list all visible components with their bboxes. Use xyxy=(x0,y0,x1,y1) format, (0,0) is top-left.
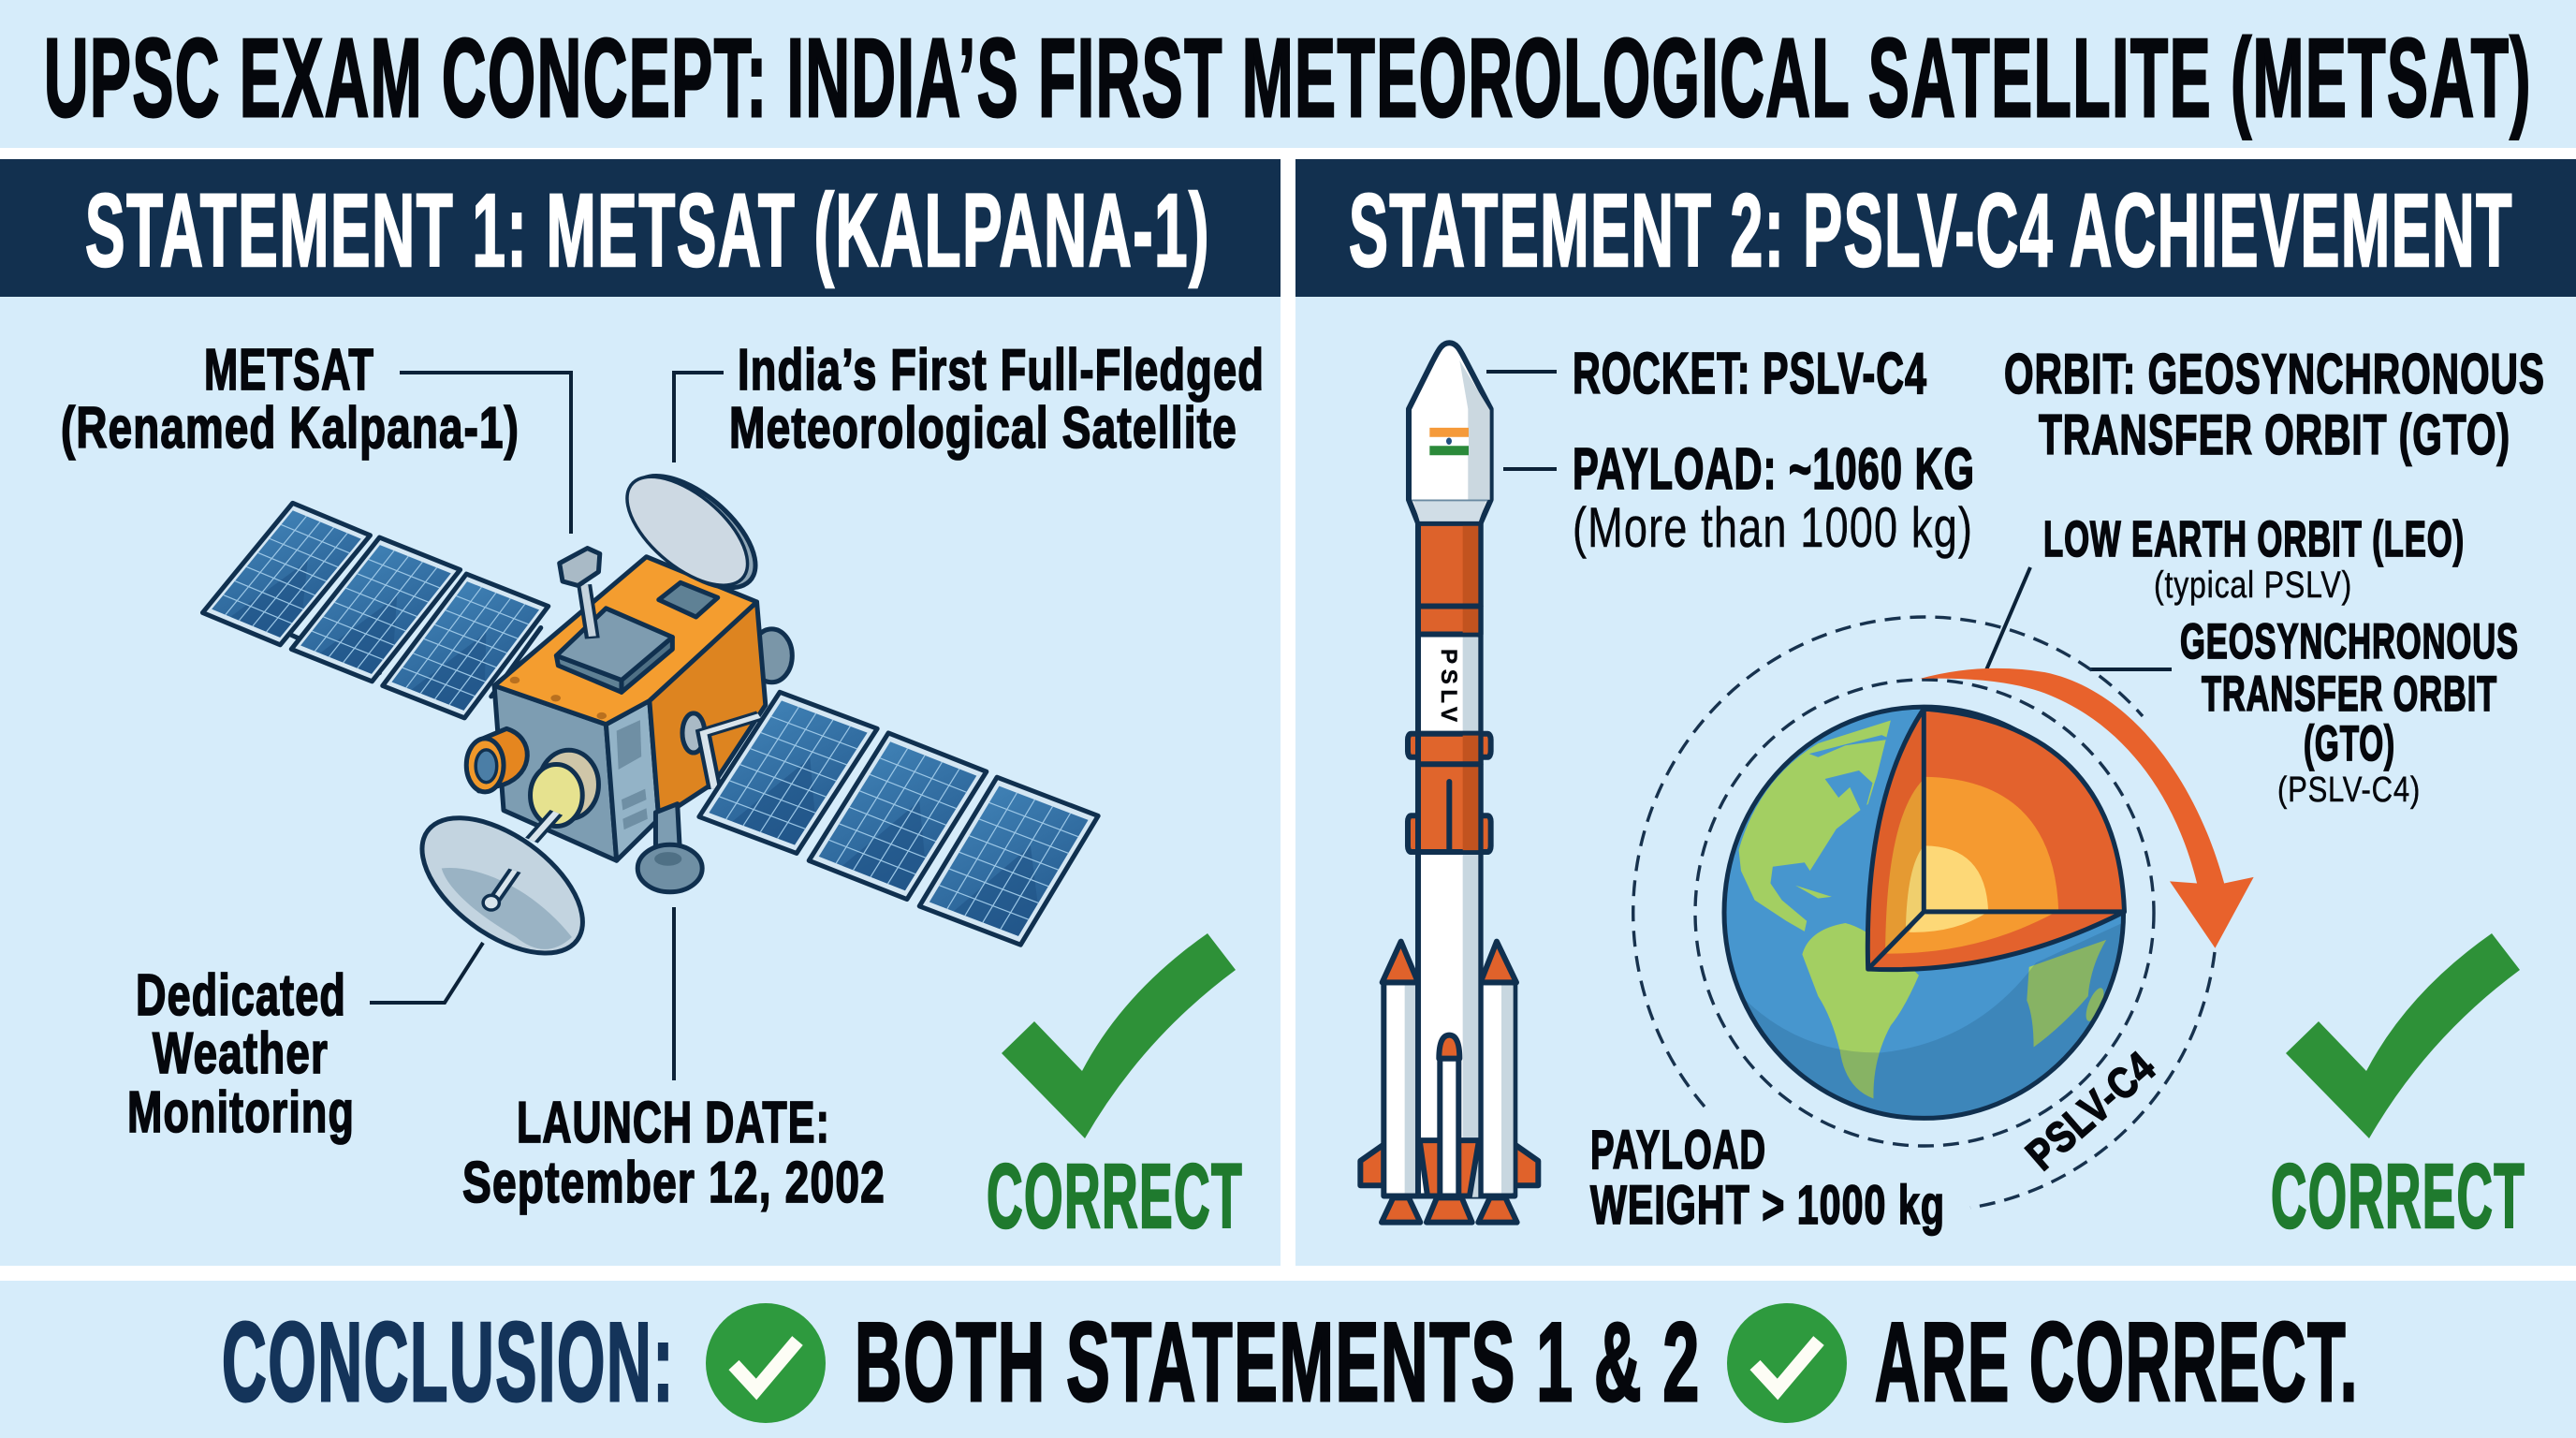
label: payload weight xyxy=(1590,1120,1945,1236)
conclusion text: both statements: BOTH STATEMENTS 1 & 2 xyxy=(855,1299,1701,1425)
satellite body xyxy=(494,557,766,860)
label: METSAT renamed Kalpana-1: METSAT xyxy=(204,338,374,403)
orange mid stage with flanges xyxy=(1408,734,1491,852)
label: geosynchronous transfer orbit xyxy=(2090,614,2519,810)
icon: check badge 1 xyxy=(706,1303,826,1423)
label: launch date xyxy=(462,907,886,1215)
label: low earth orbit: (typical PSLV) xyxy=(2154,565,2352,606)
top dish mount xyxy=(659,582,718,617)
label: PSLV-C4 along orbit: PSLV-C4 xyxy=(2016,1042,2164,1180)
illustration: METSAT satellite xyxy=(202,462,1098,973)
illustration: Earth with cutaway core xyxy=(1723,707,2136,1125)
Indian flag xyxy=(1429,428,1469,455)
panel: statement 2 xyxy=(1295,159,2576,1266)
cutaway back wall xyxy=(1924,709,2125,912)
left solar array xyxy=(202,503,549,718)
label: rocket PSLV-C4: ROCKET: PSLV-C4 xyxy=(1573,342,1927,406)
label: launch date: LAUNCH DATE: xyxy=(517,1091,830,1155)
heading: statement 1: STATEMENT 1: METSAT (KALPANA-1) xyxy=(85,173,1210,288)
label: India's first full-fledged meteorological satellite xyxy=(674,338,1265,462)
label: orbit GTO xyxy=(2004,343,2545,466)
outer orbit GTO dashed xyxy=(1633,617,2215,1208)
label: dedicated weather monitoring: Weather xyxy=(153,1021,329,1086)
label: dedicated weather monitoring xyxy=(127,943,483,1145)
small centre booster xyxy=(1427,1035,1472,1223)
right solar array xyxy=(699,692,1098,945)
core stage xyxy=(1418,523,1481,1197)
globe ocean xyxy=(1724,707,2124,1118)
label: METSAT renamed Kalpana-1: (Renamed Kalpana-1) xyxy=(61,396,520,461)
cutaway outlines xyxy=(1867,709,2125,970)
label: India's first full-fledged meteorological satellite: Meteorological Satellite xyxy=(729,396,1237,461)
yellow sensor xyxy=(531,750,598,827)
orange upper stage xyxy=(1418,523,1481,635)
icon: check badge 2 xyxy=(1727,1303,1847,1423)
label: METSAT renamed Kalpana-1 xyxy=(61,338,571,534)
inner orbit LEO dashed xyxy=(1695,680,2154,1146)
label: payload about 1060 kg: (More than 1000 kg) xyxy=(1573,496,1973,559)
cutaway floor xyxy=(1868,912,2125,970)
arrow: transfer orbit xyxy=(1920,668,2254,948)
label: geosynchronous transfer orbit: (PSLV-C4) xyxy=(2277,770,2421,810)
lower dish antenna xyxy=(390,799,615,973)
conclusion label: CONCLUSION: xyxy=(222,1299,675,1425)
label: payload weight: PAYLOAD xyxy=(1590,1120,1766,1181)
label: launch date: September 12, 2002 xyxy=(462,1151,886,1215)
label: payload about 1060 kg: PAYLOAD: ~1060 KG xyxy=(1573,437,1975,502)
top dish antenna xyxy=(603,462,780,602)
globe outline xyxy=(1724,707,2124,1118)
label: payload weight: WEIGHT > 1000 kg xyxy=(1590,1175,1945,1236)
label: India's first full-fledged meteorological satellite: India’s First Full-Fledged xyxy=(738,338,1265,403)
verdict: statement 1 correct: CORRECT xyxy=(987,1145,1243,1247)
instrument box xyxy=(556,609,672,692)
payload fairing xyxy=(1409,343,1491,523)
icon: check mark statement 1 xyxy=(1002,933,1236,1138)
orange nozzle xyxy=(466,728,527,792)
continents xyxy=(1723,720,2136,1125)
foot pad xyxy=(637,804,702,892)
label: geosynchronous transfer orbit: (GTO) xyxy=(2304,716,2395,771)
label: dedicated weather monitoring: Monitoring xyxy=(127,1080,355,1145)
small mast antenna xyxy=(560,549,600,638)
panel: statement 1 xyxy=(0,159,1281,1266)
title band xyxy=(0,0,2576,148)
side strut xyxy=(682,713,759,789)
illustration: PSLV-C4 rocket xyxy=(1360,343,1538,1223)
icon: check mark statement 2 xyxy=(2286,933,2520,1138)
rocket lettering PSLV: PSLV xyxy=(1436,649,1461,722)
label: low earth orbit xyxy=(1985,511,2465,672)
rear cylinder xyxy=(752,629,792,682)
cutaway left wall xyxy=(1867,709,1924,969)
label: dedicated weather monitoring: Dedicated xyxy=(136,963,346,1028)
conclusion band xyxy=(0,1281,2576,1438)
label: payload about 1060 kg xyxy=(1503,437,1975,559)
left booster xyxy=(1360,942,1420,1223)
right booster xyxy=(1478,942,1538,1223)
